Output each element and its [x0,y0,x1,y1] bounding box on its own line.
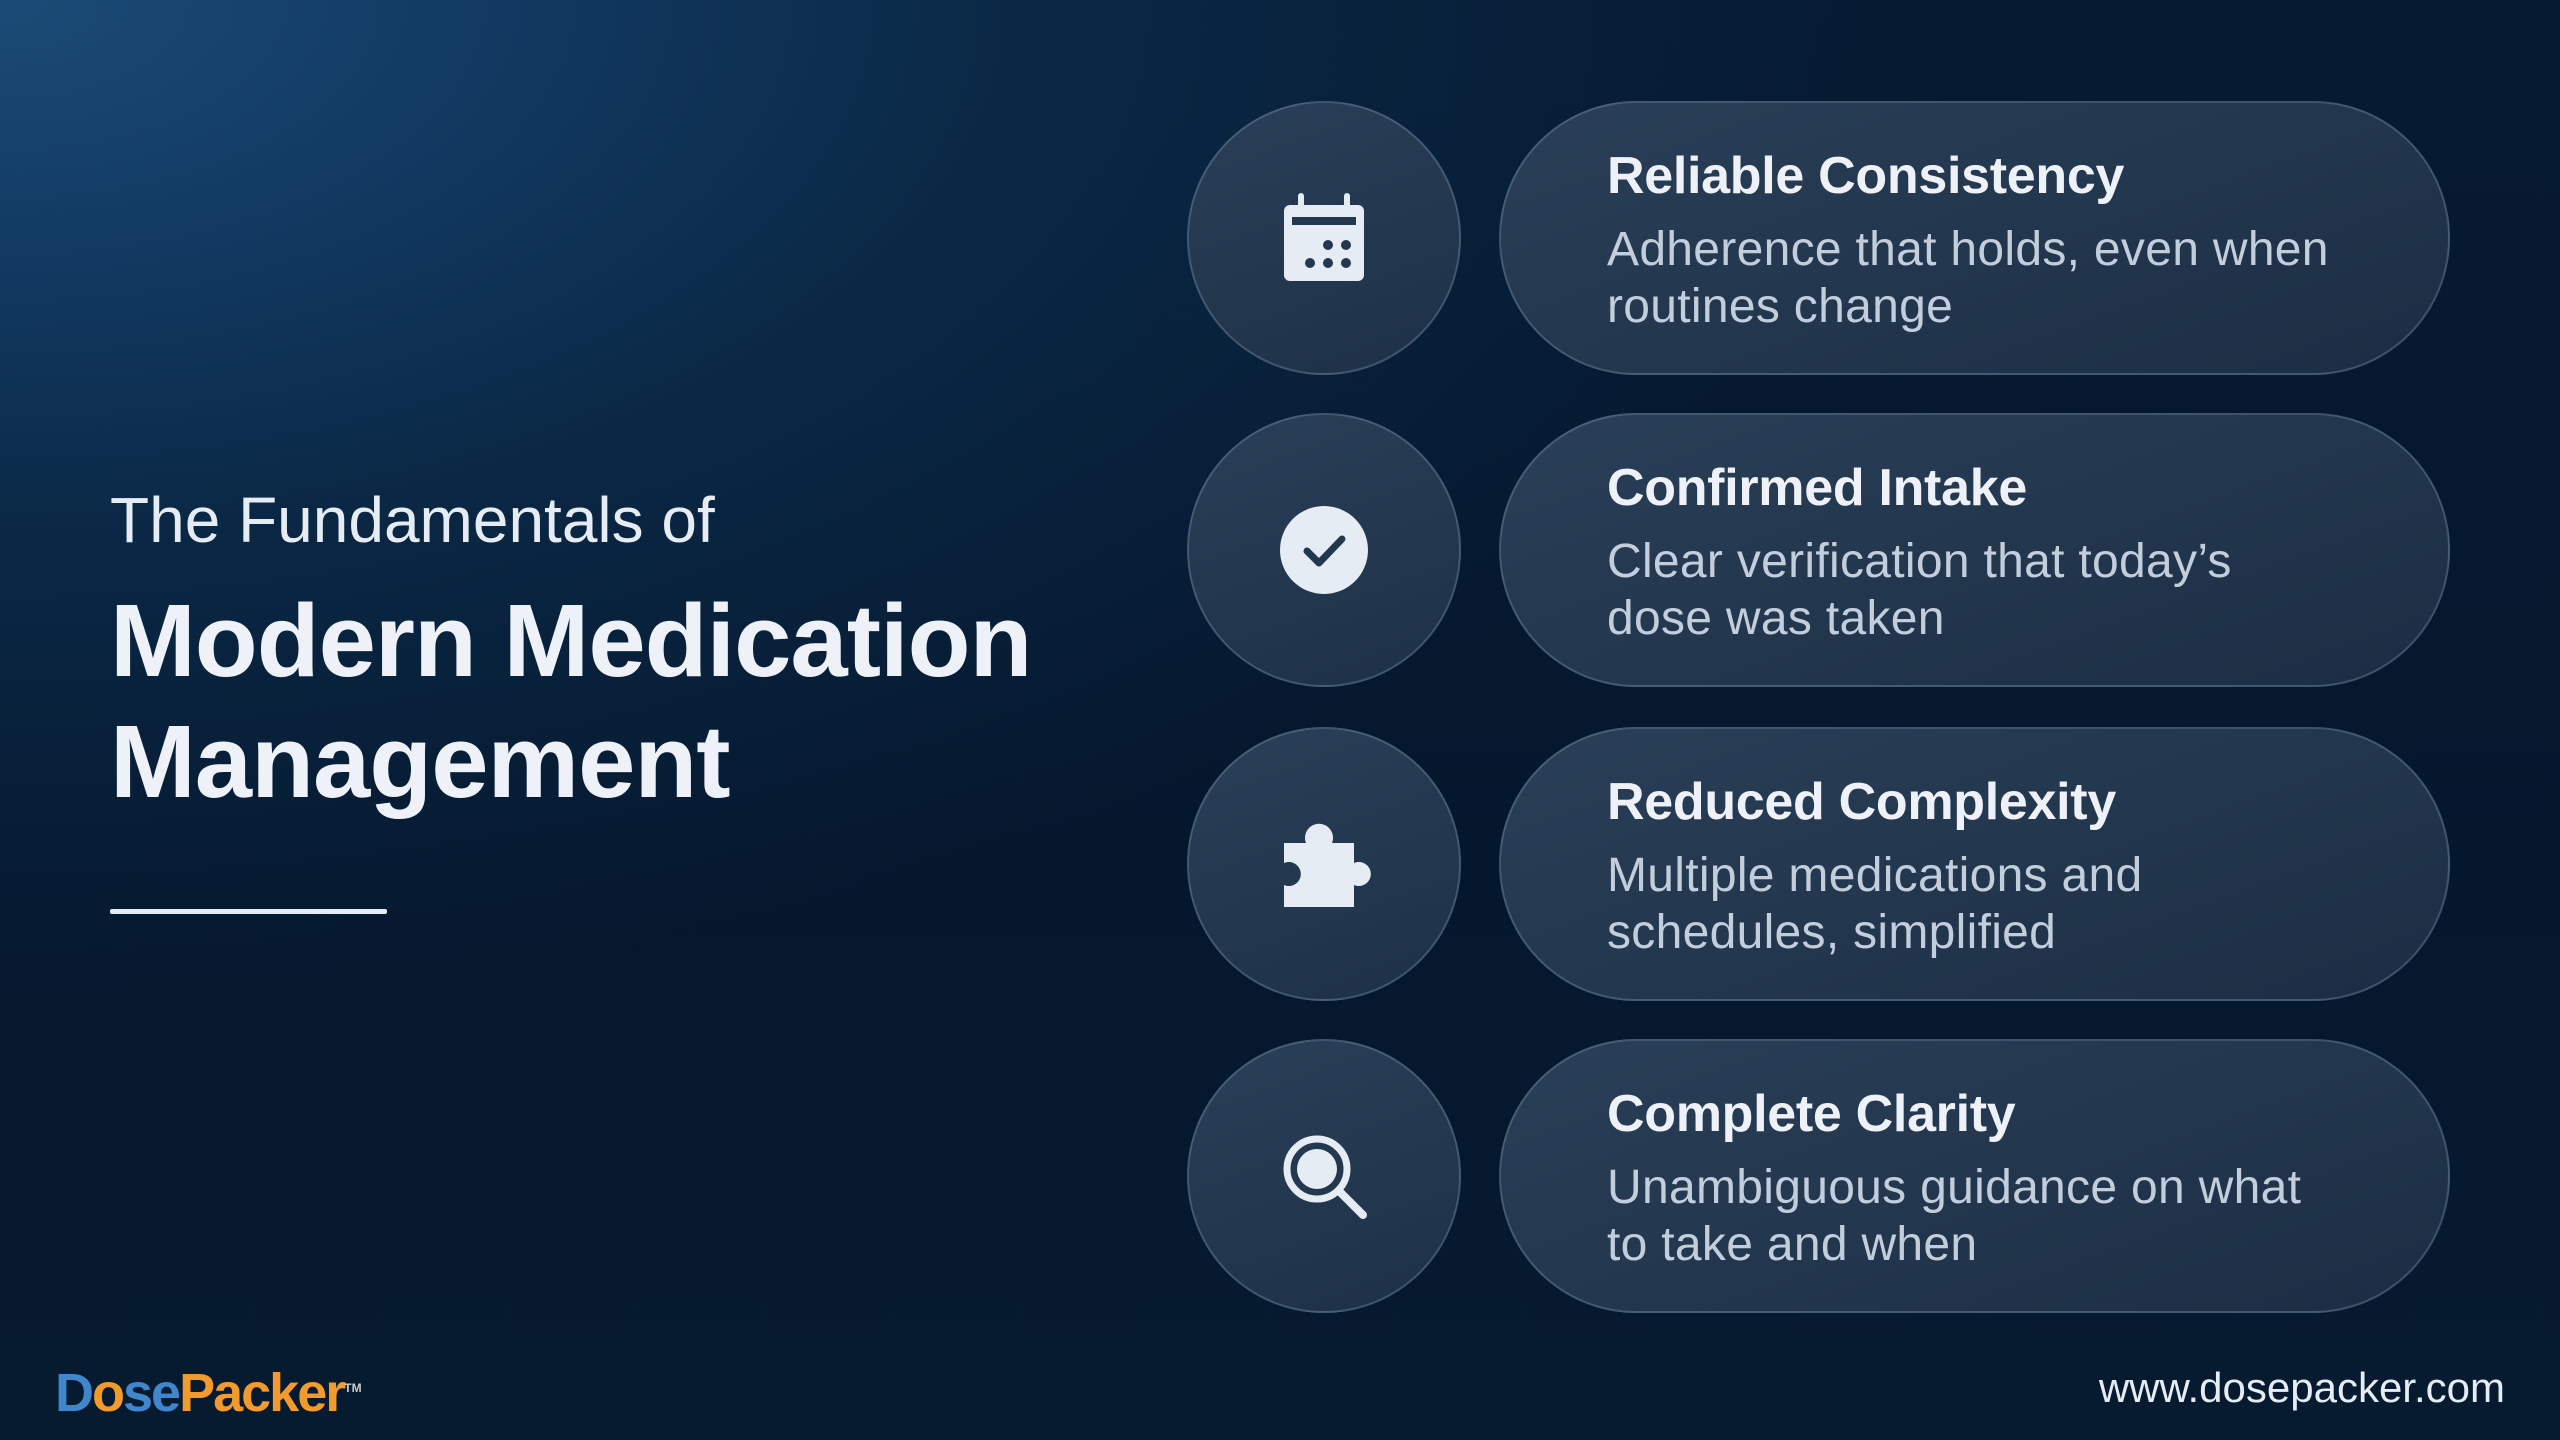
card: Complete Clarity: Complete Clarity [1607,1085,2015,1143]
card: Confirmed Intake [1499,413,2450,687]
card: Complete Clarity: Unambiguous guidance on what to take and when [1607,1161,2301,1271]
card: Confirmed Intake: Confirmed Intake [1607,459,2027,517]
card: Complete Clarity [1499,1039,2450,1313]
card: Reduced Complexity: Multiple medications and schedules, simplified [1607,849,2142,959]
icon: magnifier [1187,1039,1461,1313]
card: Reliable Consistency: Reliable Consistency [1607,147,2124,205]
heading: subtitle: The Fundamentals of [110,484,715,556]
icon: puzzle [1187,727,1461,1001]
card: Confirmed Intake: Clear verification that today’s dose was taken [1607,535,2232,645]
icon: check [1187,413,1461,687]
heading: title: Modern Medication [110,583,1031,698]
card: Reduced Complexity: Reduced Complexity [1607,773,2116,831]
card: Reliable Consistency [1499,101,2450,375]
heading: title [110,583,1031,819]
underline accent [110,909,387,914]
card: Reduced Complexity [1499,727,2450,1001]
logo: DosePacker: DosePackerTM [55,1363,362,1423]
card: Reliable Consistency: Adherence that holds, even when routines change [1607,223,2329,333]
heading: title: Management [110,704,730,819]
icon: calendar [1187,101,1461,375]
footer: website: www.dosepacker.com [2099,1364,2505,1411]
